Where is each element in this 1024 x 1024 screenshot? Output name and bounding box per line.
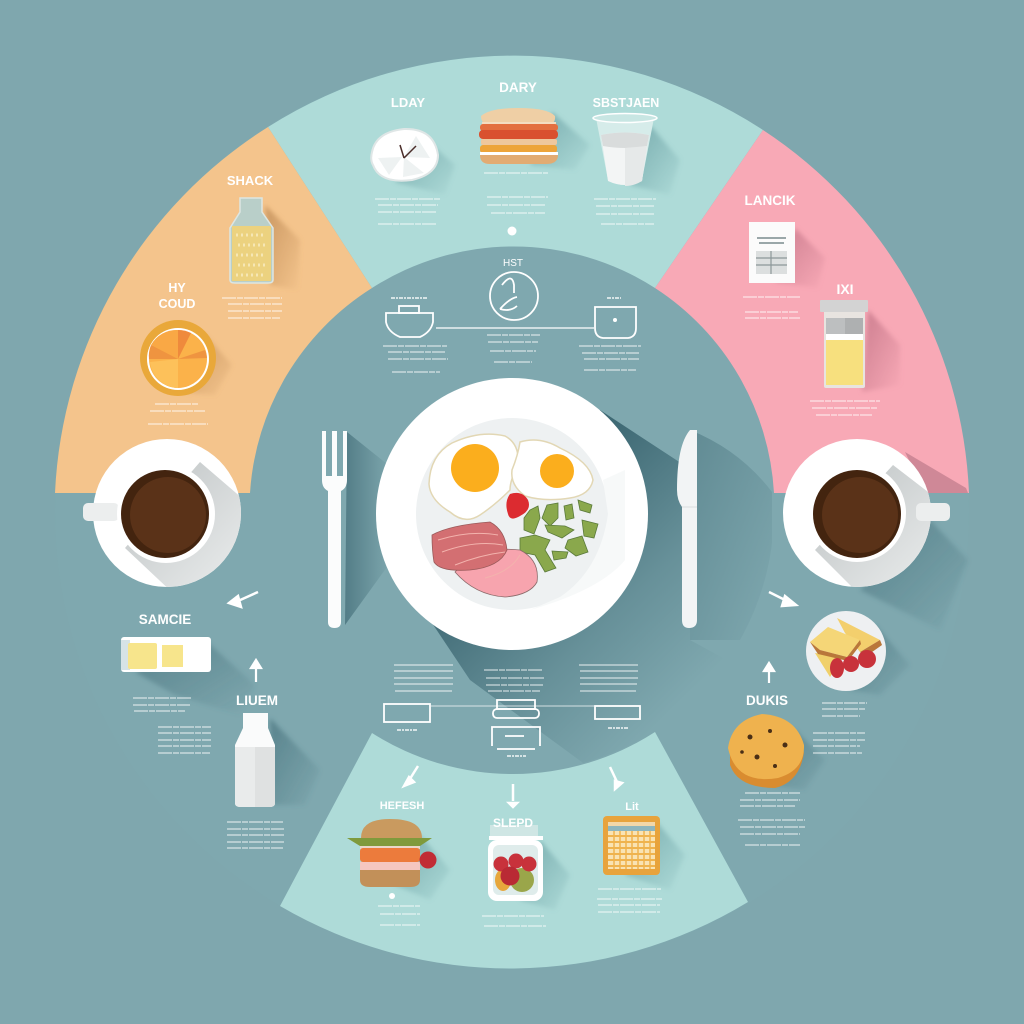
panel: bottom segment — [280, 732, 748, 968]
coffee surface — [822, 477, 898, 553]
icon: right coffee cup — [783, 439, 968, 630]
icon: cheese plate — [806, 611, 910, 695]
lunch segment group — [743, 193, 900, 415]
cup shadow on saucer — [815, 465, 930, 587]
cup rim — [808, 464, 906, 562]
icon: jar — [230, 198, 300, 290]
label — [391, 297, 427, 299]
heading: SBSTJAEN: SBSTJAEN — [593, 96, 659, 110]
caption lines — [813, 733, 865, 753]
caption lines — [579, 346, 641, 370]
label — [608, 727, 628, 729]
heading: Lit: Lit — [625, 801, 639, 813]
ham: light slice — [455, 549, 537, 597]
icon: glass of milk — [593, 114, 680, 195]
caption lines — [594, 199, 656, 224]
heading: LANCIK: LANCIK — [744, 193, 796, 208]
centre circle content: bottom — [384, 665, 640, 756]
cup shadow on saucer — [125, 462, 241, 587]
heading: DARY: DARY — [499, 80, 537, 95]
egg: left — [429, 434, 518, 519]
pepper — [506, 493, 529, 519]
icon: sandwich — [479, 108, 590, 170]
ham: dark slice — [432, 522, 507, 570]
heading: HY COUD: HY — [168, 281, 186, 295]
greens — [520, 500, 598, 572]
right lower group — [728, 592, 910, 845]
icon: circle clock — [490, 272, 538, 320]
caption lines — [133, 698, 192, 711]
label — [397, 729, 417, 731]
caption lines — [484, 173, 548, 213]
icon: cookie — [728, 714, 825, 790]
egg: right — [512, 440, 593, 500]
icon: clock plate — [371, 129, 455, 195]
dot — [389, 893, 395, 899]
icon: fork — [322, 431, 347, 628]
heading: LIUEM: LIUEM — [236, 693, 278, 708]
saucer — [783, 439, 931, 587]
box right — [595, 706, 640, 719]
left lower group — [121, 592, 320, 848]
caption lines — [383, 346, 448, 372]
caption lines — [375, 199, 440, 224]
caption lines — [738, 820, 805, 845]
heading: HY COUD: COUD — [159, 297, 195, 311]
caption lines — [579, 665, 638, 691]
caption lines — [484, 670, 545, 691]
caption lines — [743, 297, 800, 318]
label — [607, 297, 621, 299]
icon: square pot — [595, 307, 636, 338]
fork shadow — [345, 432, 392, 625]
icon: juice jar — [820, 300, 900, 392]
connecting line — [431, 705, 594, 707]
icon: orange slice — [140, 320, 232, 396]
arrow — [229, 592, 258, 607]
wheel base ring — [55, 55, 969, 969]
icon: fruit jar — [488, 825, 570, 910]
caption lines — [482, 916, 546, 926]
coffee — [813, 470, 901, 558]
icon: menu card — [749, 222, 825, 288]
snack segment group — [140, 173, 300, 424]
icon: milk bottle — [235, 713, 320, 807]
caption lines — [227, 822, 284, 848]
icon: burger — [347, 819, 450, 900]
icon: bowl — [386, 306, 433, 337]
caption lines — [378, 906, 420, 925]
icon: knife — [677, 430, 697, 628]
plate shadow — [433, 410, 690, 754]
coffee surface — [130, 477, 206, 553]
label: HST: HST — [503, 258, 523, 269]
dot — [508, 226, 516, 236]
caption lines — [822, 703, 867, 716]
handle — [83, 503, 119, 521]
top segment group — [371, 80, 680, 236]
caption lines — [597, 889, 662, 912]
caption lines — [810, 401, 880, 415]
arrow — [404, 766, 418, 786]
icon: cracker — [603, 816, 685, 890]
caption lines — [487, 335, 540, 362]
caption lines — [222, 298, 282, 318]
connecting line — [436, 327, 594, 329]
panel: snack segment — [55, 127, 372, 493]
heading: DUKIS: DUKIS — [746, 693, 788, 708]
heading: SLEPD: SLEPD — [493, 816, 533, 830]
saucer — [93, 439, 241, 587]
panel: lunch segment — [655, 130, 969, 493]
heading: SHACK: SHACK — [227, 173, 274, 188]
plate with breakfast — [376, 378, 648, 650]
arrow — [610, 767, 622, 789]
box left — [384, 704, 430, 722]
icon: butter dish — [121, 637, 255, 715]
caption lines — [394, 665, 453, 691]
plate rim — [376, 378, 648, 650]
pink shadow — [905, 452, 968, 493]
cup rim — [117, 465, 215, 563]
label — [507, 755, 526, 757]
coffee — [121, 470, 209, 558]
arrow — [251, 660, 261, 682]
ground shadow — [860, 520, 968, 630]
knife shadow — [690, 430, 772, 640]
arrow — [509, 784, 517, 807]
bottom segment group — [347, 766, 685, 926]
heading: IXI: IXI — [836, 281, 854, 297]
caption lines — [740, 793, 800, 806]
heading: SAMCIE: SAMCIE — [139, 612, 191, 627]
centre circle content: top — [383, 258, 641, 372]
arrow — [764, 663, 774, 683]
icon: left coffee cup — [83, 439, 241, 587]
panel: top segment — [268, 56, 763, 288]
heading: LDAY: LDAY — [391, 95, 425, 110]
plate well — [416, 418, 608, 610]
heading: HEFESH: HEFESH — [380, 800, 424, 812]
caption lines — [148, 404, 208, 424]
handle — [916, 503, 950, 521]
box centre — [492, 700, 540, 749]
arrow — [769, 592, 796, 606]
caption lines — [158, 727, 211, 753]
